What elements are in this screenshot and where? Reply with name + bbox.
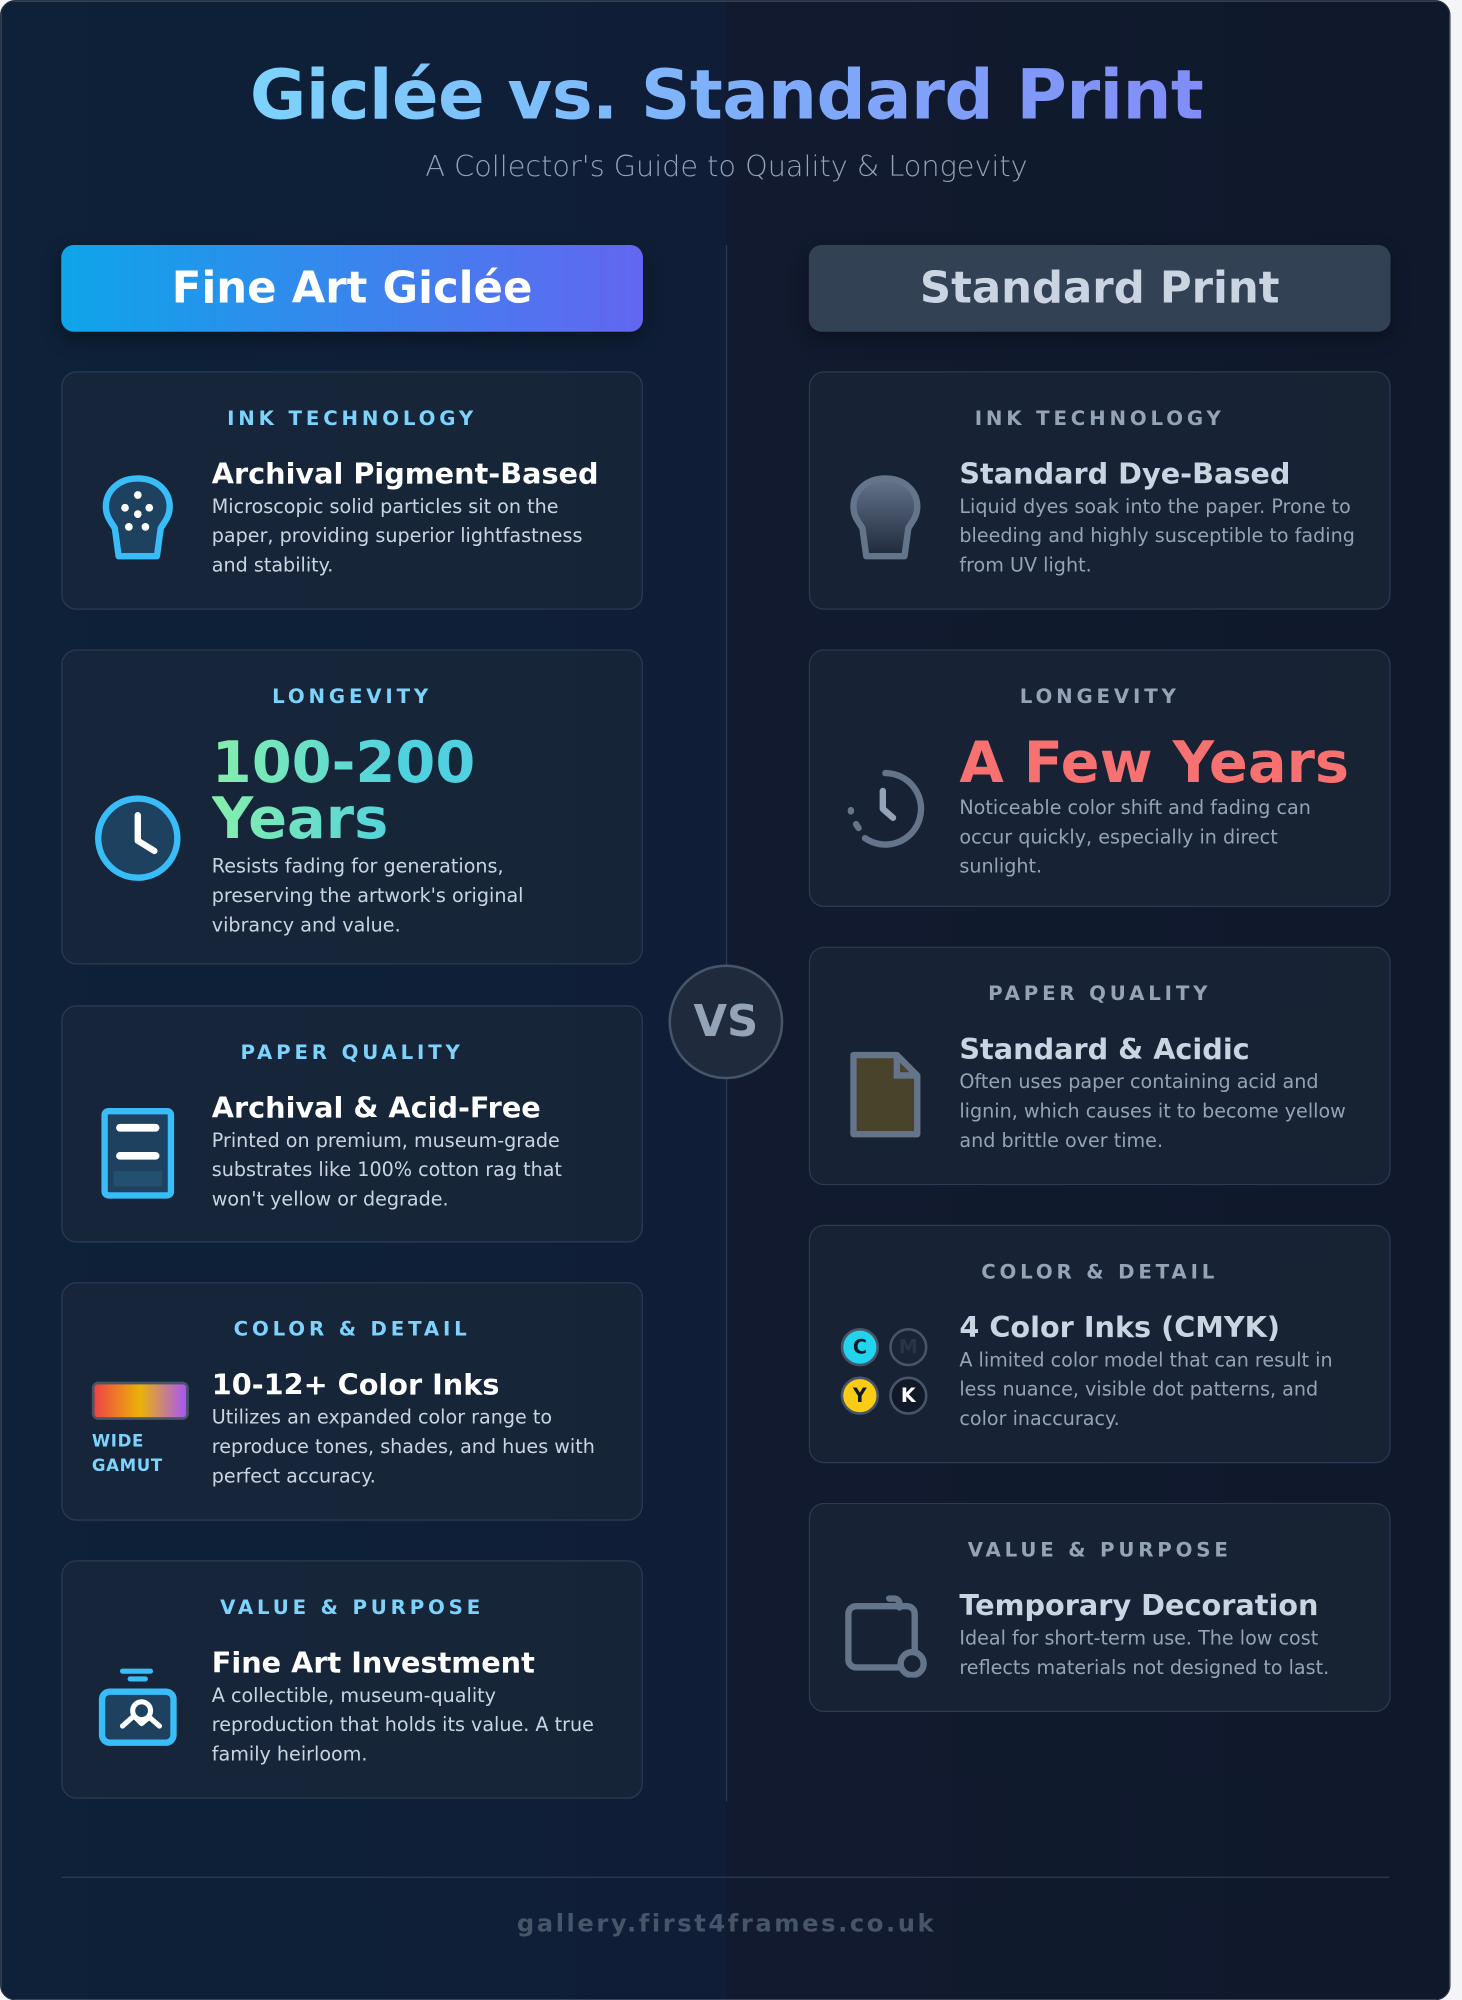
icon: archival paper — [101, 1108, 174, 1199]
header: giclee: Fine Art Giclée — [172, 263, 532, 314]
panel: standard paper: Standard & Acidic — [959, 1033, 1250, 1067]
header: standard — [809, 245, 1391, 332]
icon: CMYK dots: C — [852, 1335, 866, 1358]
panel: standard color: COLOR & DETAIL — [981, 1260, 1218, 1283]
icon: fading clock — [848, 770, 924, 848]
panel: giclee ink: Microscopic solid particles sit on the paper, providing superior lightfastness and stability. — [212, 495, 582, 577]
panel: giclee value: Fine Art Investment — [212, 1647, 535, 1680]
icon: framed art — [98, 1668, 177, 1746]
panel: giclee paper: Printed on premium, museum-grade substrates like 100% cotton rag that won't yellow or degrade. — [212, 1129, 562, 1211]
VS badge — [668, 964, 783, 1079]
icon: wide gamut bar — [92, 1382, 189, 1475]
panel: standard ink: Standard Dye-Based — [959, 458, 1290, 491]
panel: giclee longevity: Resists fading for generations, preserving the artwork's original vibrancy and value. — [212, 855, 523, 936]
title: Giclée vs. Standard Print — [250, 55, 1203, 135]
panel: standard ink: Liquid dyes soak into the paper. Prone to bleeding and highly susceptible to fading from UV light. — [959, 495, 1355, 577]
subtitle: A Collector's Guide to Quality & Longevity — [425, 151, 1028, 184]
panel: giclee paper: PAPER QUALITY — [241, 1041, 464, 1064]
panel: giclee color: 10-12+ Color Inks — [212, 1369, 499, 1402]
panel: standard paper: PAPER QUALITY — [988, 982, 1211, 1005]
panel: standard paper — [809, 947, 1391, 1185]
panel: giclee ink — [61, 371, 643, 610]
panel: standard paper: Often uses paper containing acid and lignin, which causes it to become yellow and brittle over time. — [959, 1070, 1346, 1152]
icon: temporary frame — [845, 1595, 927, 1678]
panel: giclee value: A collectible, museum-quality reproduction that holds its value. A true family heirloom. — [212, 1684, 594, 1766]
panel: giclee ink: INK TECHNOLOGY — [227, 407, 477, 430]
panel: standard value: VALUE & PURPOSE — [968, 1539, 1232, 1562]
panel: standard color: 4 Color Inks (CMYK) — [959, 1311, 1280, 1345]
panel: standard ink: INK TECHNOLOGY — [975, 407, 1225, 430]
panel: standard longevity: A Few Years — [959, 728, 1349, 796]
panel: standard value — [809, 1503, 1391, 1712]
panel: standard longevity — [809, 649, 1391, 907]
panel: standard value: Temporary Decoration — [959, 1590, 1318, 1623]
icon: dye bulb — [850, 475, 920, 560]
footer: gallery.first4frames.co.uk — [517, 1910, 936, 1938]
icon: CMYK dots: K — [900, 1383, 916, 1406]
VS badge: VS — [693, 996, 758, 1047]
icon: CMYK dots — [840, 1328, 928, 1415]
panel: standard longevity: LONGEVITY — [1020, 685, 1180, 708]
icon: clock — [95, 795, 180, 881]
icon: CMYK dots: Y — [851, 1383, 867, 1406]
panel: standard value: Ideal for short-term use. The low cost reflects materials not designed to last. — [959, 1627, 1329, 1679]
icon: CMYK dots: M — [898, 1335, 917, 1358]
panel: giclee color — [61, 1282, 643, 1521]
panel: giclee paper — [61, 1005, 643, 1243]
panel: standard longevity: Noticeable color shift and fading can occur quickly, especially in direct sunlight. — [959, 796, 1311, 878]
panel: giclee longevity: 100-200 Years — [212, 728, 475, 852]
header: standard: Standard Print — [920, 263, 1280, 314]
panel: giclee paper: Archival & Acid-Free — [212, 1092, 541, 1125]
header: giclee — [61, 245, 643, 332]
panel: giclee value — [61, 1560, 643, 1799]
panel: standard color: A limited color model that can result in less nuance, visible dot patterns, and color inaccuracy. — [959, 1348, 1333, 1430]
panel: standard ink — [809, 371, 1391, 610]
panel: giclee longevity — [61, 649, 643, 964]
panel: giclee longevity: LONGEVITY — [272, 685, 432, 708]
panel: giclee value: VALUE & PURPOSE — [220, 1596, 484, 1619]
panel: giclee color: COLOR & DETAIL — [234, 1318, 471, 1341]
icon: acidic paper — [850, 1052, 920, 1138]
panel: giclee color: Utilizes an expanded color range to reproduce tones, shades, and hues with perfect accuracy. — [212, 1406, 595, 1488]
icon: pigment bulb — [102, 475, 173, 560]
panel: giclee ink: Archival Pigment-Based — [212, 458, 599, 491]
panel: standard color — [809, 1225, 1391, 1463]
icon: wide gamut bar: GAMUT — [92, 1456, 163, 1475]
center divider — [726, 245, 727, 1801]
icon: wide gamut bar: WIDE — [92, 1432, 144, 1451]
